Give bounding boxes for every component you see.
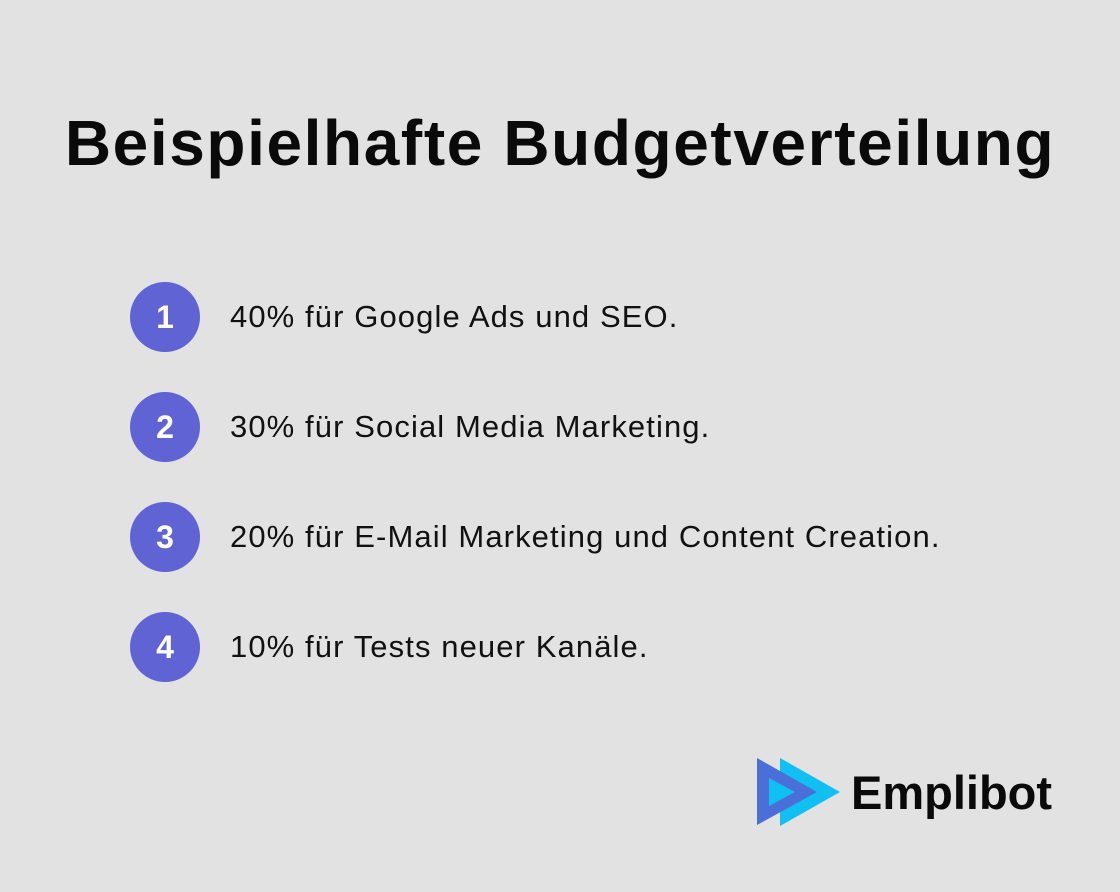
item 1: 1 [156, 299, 174, 335]
item 4: 10% für Tests neuer Kanäle. [230, 629, 649, 664]
item 1: 40% für Google Ads und SEO. [230, 299, 678, 334]
item 2: 30% für Social Media Marketing. [230, 409, 710, 444]
item 3: 20% für E-Mail Marketing und Content Creation. [230, 519, 941, 554]
item 1 [130, 282, 678, 352]
logo text: Emplibot [851, 766, 1052, 819]
item 3: 3 [156, 519, 174, 555]
icon: logo triangles [757, 758, 840, 826]
title: Beispielhafte Budgetverteilung [65, 107, 1055, 179]
logo [757, 758, 1052, 826]
item 3 [130, 502, 941, 572]
item 4 [130, 612, 649, 682]
item 2: 2 [156, 409, 174, 445]
item 2 [130, 392, 710, 462]
item 4: 4 [156, 629, 174, 665]
